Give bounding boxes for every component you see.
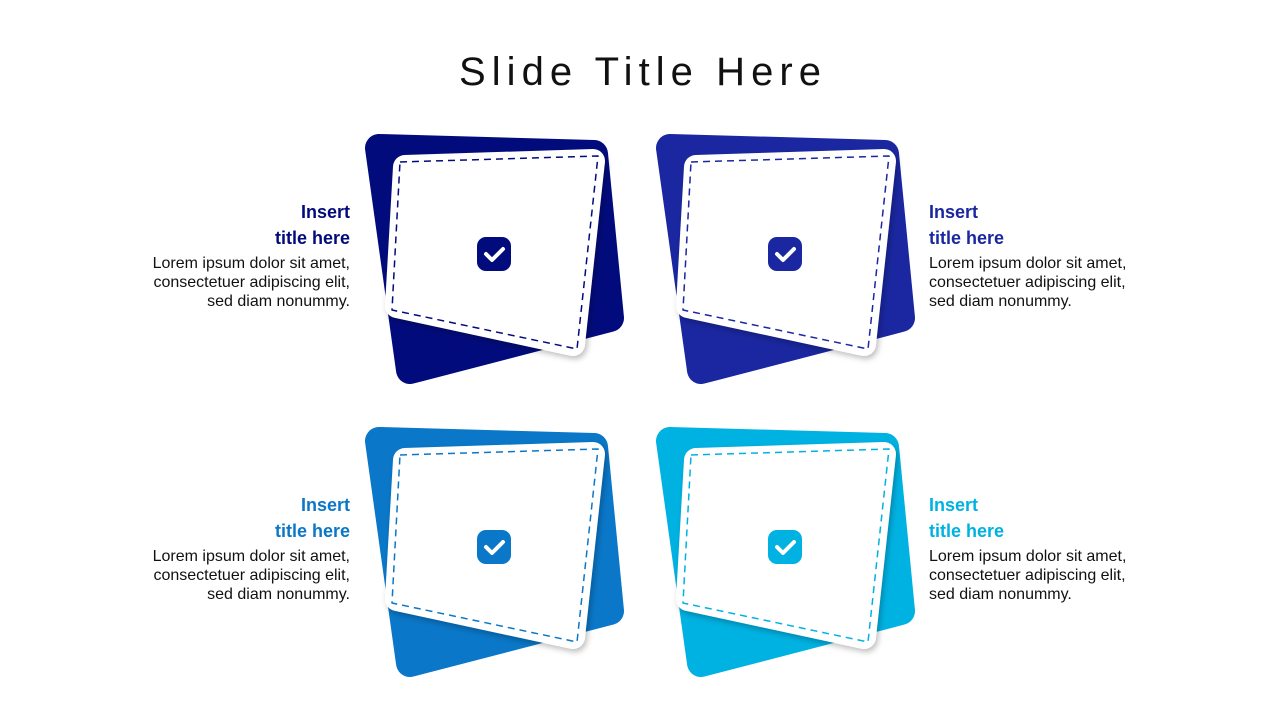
panel: card 4 xyxy=(670,441,901,663)
text block 1: title here xyxy=(275,228,350,248)
text block 4: title here xyxy=(929,521,1004,541)
text block 3: consectetuer adipiscing elit, xyxy=(153,567,350,584)
text block 1 xyxy=(153,202,350,310)
text block 4: Insert xyxy=(929,495,978,515)
icon: check 1 xyxy=(477,237,511,271)
text block 2: Lorem ipsum dolor sit amet, xyxy=(929,255,1126,272)
text block 4: consectetuer adipiscing elit, xyxy=(929,567,1126,584)
text block 3: Insert xyxy=(301,495,350,515)
text block 3: title here xyxy=(275,521,350,541)
text block 4: Lorem ipsum dolor sit amet, xyxy=(929,548,1126,565)
panel: card 1 xyxy=(379,148,610,370)
icon: check 4 xyxy=(768,530,802,564)
text block 2: consectetuer adipiscing elit, xyxy=(929,274,1126,291)
panel: card 3 xyxy=(379,441,610,663)
title: Slide Title Here xyxy=(459,50,821,94)
icon: check 3 xyxy=(477,530,511,564)
text block 2: title here xyxy=(929,228,1004,248)
text block 1: Lorem ipsum dolor sit amet, xyxy=(153,255,350,272)
text block 2: sed diam nonummy. xyxy=(929,293,1072,310)
text block 3: sed diam nonummy. xyxy=(207,586,350,603)
panel: card 2 xyxy=(670,148,901,370)
icon: check 2 xyxy=(768,237,802,271)
text block 2: Insert xyxy=(929,202,978,222)
text block 2 xyxy=(929,202,1126,310)
text block 1: sed diam nonummy. xyxy=(207,293,350,310)
text block 1: Insert xyxy=(301,202,350,222)
text block 3: Lorem ipsum dolor sit amet, xyxy=(153,548,350,565)
text block 3 xyxy=(153,495,350,603)
text block 4: sed diam nonummy. xyxy=(929,586,1072,603)
text block 1: consectetuer adipiscing elit, xyxy=(153,274,350,291)
text block 4 xyxy=(929,495,1126,603)
